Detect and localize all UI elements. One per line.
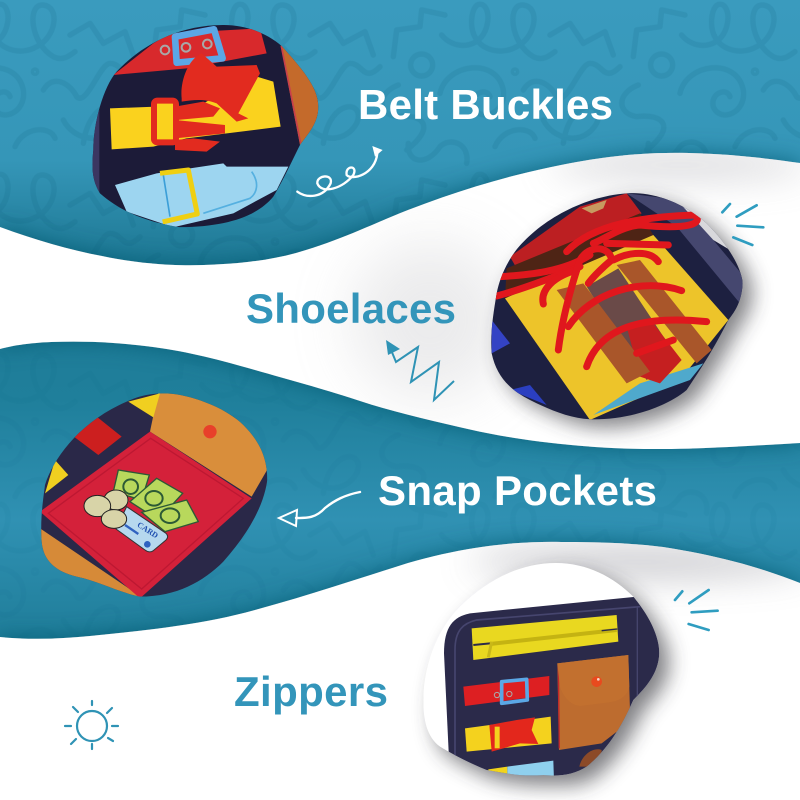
arrow: white curved arrow to snap pocket	[279, 492, 360, 526]
heading: Snap Pockets: Snap Pockets	[378, 467, 657, 514]
photo blob: snap pockets	[37, 388, 273, 602]
heading: Shoelaces: Shoelaces	[246, 285, 456, 332]
arrow: white curly arrow	[297, 146, 383, 196]
icon: blue accent ticks near shoelaces	[722, 204, 763, 245]
photo blob: zippers	[420, 560, 718, 800]
white wave band: shoelaces	[0, 151, 800, 449]
heading: Zippers: Zippers	[234, 668, 388, 715]
photo blob: shoelaces	[487, 187, 763, 423]
icon: sun	[65, 701, 118, 749]
white wave band: zippers	[0, 542, 800, 800]
arrow: blue zigzag arrow	[386, 340, 454, 400]
card label: CARD	[136, 520, 160, 540]
heading: Belt Buckles: Belt Buckles	[358, 81, 613, 128]
icon: blue accent ticks near zippers	[675, 590, 718, 630]
photo blob: belt buckles	[92, 25, 318, 228]
